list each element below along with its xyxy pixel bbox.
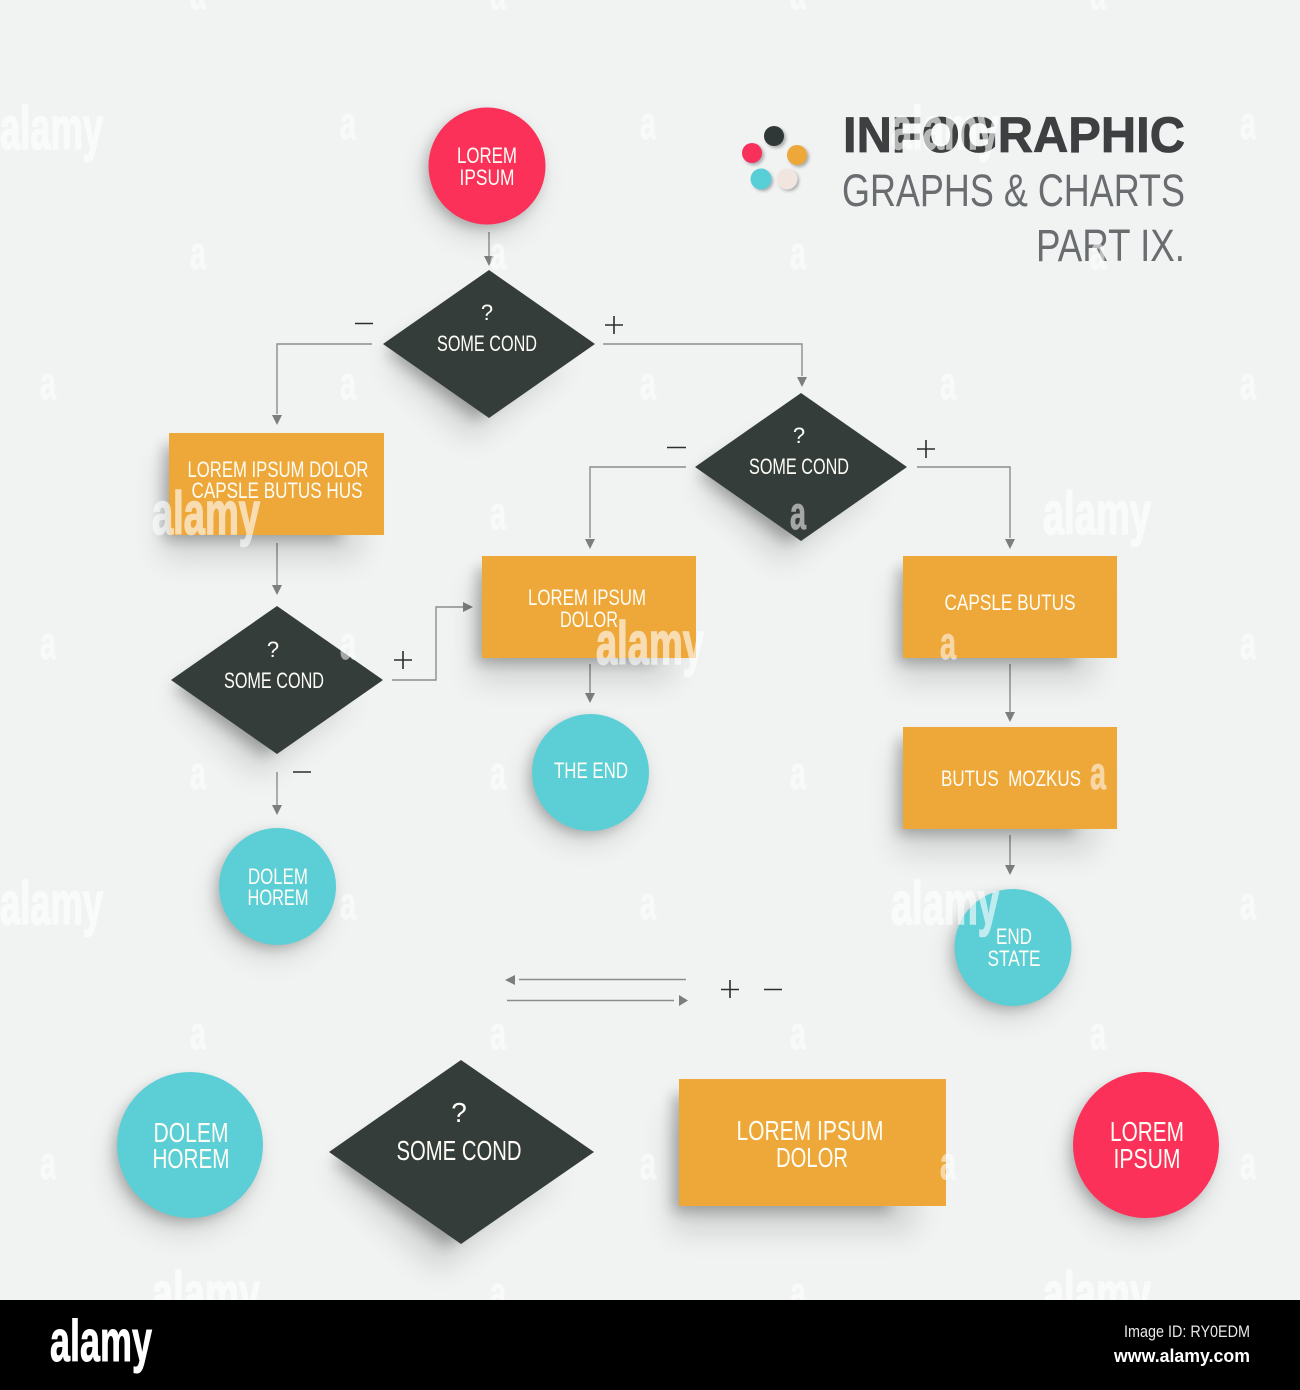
end circle: end state	[952, 889, 1072, 1017]
process box 3	[896, 556, 1117, 681]
decision diamond 2	[695, 393, 907, 563]
decision diamond 2: ?	[793, 423, 805, 448]
watermarks: alamy	[152, 480, 260, 547]
process box 2: LOREM IPSUM	[528, 585, 646, 610]
end circle: end state: END	[996, 924, 1032, 949]
logo: five coloured dots	[742, 126, 809, 191]
watermarks: a	[490, 487, 506, 539]
legend: circle dolem horem: DOLEM	[154, 1117, 228, 1148]
decision diamond 1: ?	[481, 300, 493, 325]
process box 1	[162, 433, 384, 558]
decision diamond 3: ?	[267, 637, 279, 662]
watermarks: a	[340, 97, 356, 149]
watermarks: a	[790, 1267, 806, 1319]
legend: circle lorem ipsum	[1070, 1072, 1219, 1232]
legend: diamond some cond: ?	[451, 1097, 467, 1128]
title: GRAPHS & CHARTS	[842, 165, 1185, 216]
watermarks: a	[1240, 877, 1256, 929]
watermarks: alamy	[0, 870, 103, 937]
legend: process box: LOREM IPSUM	[736, 1115, 884, 1146]
watermarks: a	[640, 357, 656, 409]
process box 2	[475, 556, 696, 681]
watermarks: a	[490, 747, 506, 799]
end circle: the end	[529, 714, 649, 842]
watermarks: alamy	[1043, 1260, 1151, 1327]
watermarks: a	[640, 97, 656, 149]
title: INFOGRAPHIC	[843, 107, 1185, 163]
watermarks: a	[1090, 747, 1106, 799]
legend: circle dolem horem: HOREM	[152, 1143, 230, 1174]
decision diamond 1	[383, 270, 595, 440]
decision diamond 3	[171, 606, 383, 776]
legend: process box	[671, 1079, 946, 1232]
end circle: dolem horem: HOREM	[248, 885, 308, 910]
legend: arrows and signs	[505, 975, 782, 1006]
process box 2: DOLOR	[560, 607, 618, 632]
image id: Image ID: RY0EDM	[1124, 1322, 1250, 1341]
watermarks: a	[1090, 227, 1106, 279]
watermarks: a	[940, 617, 956, 669]
website: www.alamy.com	[1113, 1346, 1250, 1366]
watermarks: a	[40, 357, 56, 409]
watermarks: a	[1240, 617, 1256, 669]
legend: diamond some cond: SOME COND	[396, 1135, 522, 1166]
end circle: dolem horem: DOLEM	[248, 864, 308, 889]
watermarks: a	[790, 1007, 806, 1059]
decision diamond 2: SOME COND	[749, 454, 849, 479]
watermarks: alamy	[0, 95, 103, 162]
watermarks: a	[790, 227, 806, 279]
legend: circle lorem ipsum: LOREM	[1110, 1116, 1184, 1147]
watermarks: a	[790, 487, 806, 539]
watermarks: a	[490, 227, 506, 279]
end circle: end state: STATE	[988, 946, 1040, 971]
start circle: IPSUM	[460, 165, 514, 190]
end circle: the end: THE END	[554, 758, 628, 783]
watermarks: a	[940, 1137, 956, 1189]
watermarks: alamy	[1043, 480, 1151, 547]
connector arrows	[272, 232, 1015, 875]
watermarks: a	[40, 1137, 56, 1189]
process box 4: BUTUS MOZKUS	[941, 766, 1081, 791]
title	[842, 107, 1185, 271]
title: PART IX.	[1036, 220, 1185, 271]
process box 4	[896, 727, 1117, 852]
legend: diamond some cond	[329, 1060, 594, 1272]
watermarks: a	[790, 747, 806, 799]
legend: circle dolem horem	[114, 1072, 263, 1232]
process box 3: CAPSLE BUTUS	[944, 590, 1076, 615]
plus and minus branch signs	[293, 316, 935, 772]
process box 1: CAPSLE BUTUS HUS	[192, 478, 362, 503]
decision diamond 3: SOME COND	[224, 668, 324, 693]
watermarks: alamy	[891, 95, 999, 162]
watermarks: a	[190, 1007, 206, 1059]
watermarks: a	[1240, 97, 1256, 149]
footer logo: alamy	[50, 1309, 152, 1374]
watermarks: a	[190, 747, 206, 799]
decision diamond 1: SOME COND	[437, 331, 537, 356]
watermarks: a	[340, 357, 356, 409]
end circle: dolem horem	[216, 828, 336, 956]
watermarks: a	[190, 227, 206, 279]
watermarks: a	[490, 1007, 506, 1059]
watermarks: alamy	[596, 610, 704, 677]
watermarks: a	[1240, 357, 1256, 409]
start circle: LOREM	[457, 143, 517, 168]
watermarks: a	[640, 877, 656, 929]
watermarks: a	[340, 617, 356, 669]
watermarks: alamy	[152, 1260, 260, 1327]
legend: circle lorem ipsum: IPSUM	[1114, 1143, 1180, 1174]
start circle	[426, 108, 546, 236]
process box 1: LOREM IPSUM DOLOR	[188, 457, 368, 482]
watermarks: a	[340, 877, 356, 929]
footer bar	[0, 1300, 1300, 1390]
watermarks: a	[1090, 1007, 1106, 1059]
watermarks: a	[490, 1267, 506, 1319]
watermarks: alamy	[891, 870, 999, 937]
watermarks: a	[940, 357, 956, 409]
legend: process box: DOLOR	[776, 1142, 848, 1173]
watermarks: a	[640, 1137, 656, 1189]
watermarks: a	[1240, 1137, 1256, 1189]
watermarks: a	[40, 617, 56, 669]
